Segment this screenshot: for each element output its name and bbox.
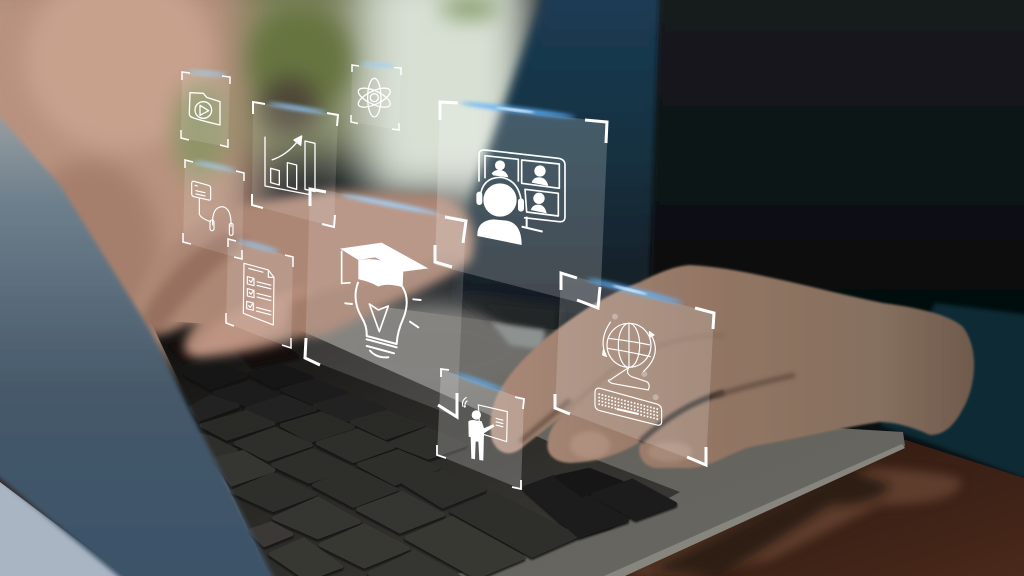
panel: checklist (226, 239, 293, 348)
icon: checklist document (243, 263, 274, 325)
laptop screen, blurred foreground (0, 95, 278, 576)
icon: atom (356, 78, 393, 117)
panel: teacher at board (437, 369, 524, 489)
icon: video folder (189, 93, 220, 125)
table left strip and desk (0, 455, 150, 576)
icon: globe on keyboard (595, 314, 662, 425)
icon: graduation cap bulb (340, 243, 428, 357)
finger shadow (642, 393, 722, 440)
right hand (491, 265, 974, 468)
panel: growth chart (252, 101, 338, 227)
icon: speech bubble and headphones (192, 181, 233, 235)
dark shirt (650, 0, 1024, 320)
panel: graduation cap and light bulb (305, 187, 466, 417)
navy shirt (455, 0, 665, 330)
laptop deck (200, 290, 905, 576)
icon: bar chart with arrow (265, 136, 315, 195)
left hand (135, 190, 474, 358)
panel: atom (351, 62, 401, 130)
icon: teacher and wireless board (462, 397, 507, 461)
panel: folder (181, 70, 230, 147)
panel: video conference (435, 101, 608, 308)
panel: headset chat (183, 160, 244, 259)
panel: globe and keyboard (555, 273, 714, 465)
keyboard keys (171, 334, 675, 576)
hand creases (520, 335, 795, 462)
sleeve (880, 303, 1024, 480)
keyboard well (150, 320, 680, 576)
icon: headset user and video call screen (476, 150, 565, 245)
wooden table (590, 435, 1024, 576)
